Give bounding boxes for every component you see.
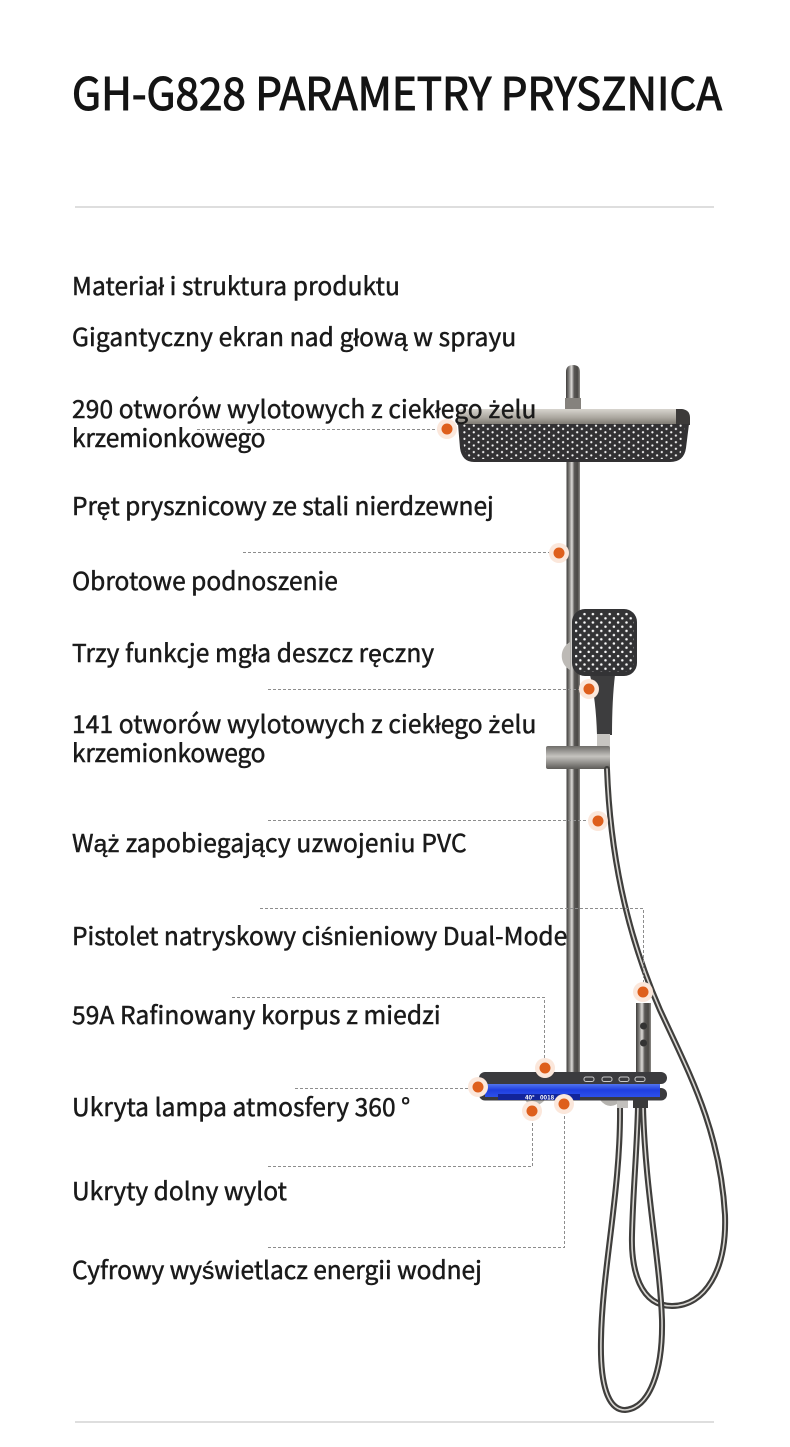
title: GH-G828 PARAMETRY PRYSZNICA [72, 58, 723, 123]
feature: copper body: 59A Rafinowany korpus z miedzi [72, 997, 441, 1032]
heading: material and structure: Materiał i struktura produktu [72, 268, 400, 303]
handheld shower head [572, 609, 637, 747]
shelf buttons [584, 1077, 645, 1082]
feature: rotating lift: Obrotowe podnoszenie [72, 563, 338, 598]
shelf control panel [479, 1072, 667, 1108]
feature: spray gun: Pistolet natryskowy ciśnieniowy Dual-Mode [72, 918, 567, 953]
feature: stainless rod: Pręt prysznicowy ze stali nierdzewnej [72, 488, 494, 523]
shelf control panel: 0018 [540, 1092, 555, 1102]
feature: ambient lamp: Ukryta lampa atmosfery 360 ° [72, 1089, 410, 1124]
display readout: 40° [525, 1092, 535, 1102]
sliding pole [566, 460, 580, 1075]
overhead shower head [457, 409, 690, 462]
shower arm gooseneck [565, 365, 581, 409]
feature: 141 outlet holes: 141 otworów wylotowych z ciekłego żelu [72, 706, 537, 741]
feature: three functions: Trzy funkcje mgła deszcz ręczny [72, 635, 434, 670]
feature: 141 outlet holes [72, 706, 537, 770]
callout markers [437, 419, 653, 1121]
feature: bottom outlet: Ukryty dolny wylot [72, 1173, 287, 1208]
feature: 290 outlet holes: krzemionkowego [72, 420, 265, 455]
pole slider bracket [546, 746, 610, 769]
feature: 141 outlet holes: krzemionkowego [72, 735, 265, 770]
feature: PVC hose: Wąż zapobiegający uzwojeniu PVC [72, 825, 467, 860]
feature: 290 outlet holes [72, 391, 537, 455]
wall mount disc [562, 642, 570, 670]
small hand control [636, 1003, 651, 1073]
feature: overhead spray: Gigantyczny ekran nad głową w sprayu [72, 319, 516, 354]
hoses [601, 769, 725, 1410]
feature list [72, 268, 567, 1287]
feature: digital display: Cyfrowy wyświetlacz energii wodnej [72, 1252, 482, 1287]
product illustration: shower system [457, 365, 725, 1410]
feature: 290 outlet holes: 290 otworów wylotowych z ciekłego żelu [72, 391, 537, 426]
callout leader lines [197, 430, 644, 1248]
